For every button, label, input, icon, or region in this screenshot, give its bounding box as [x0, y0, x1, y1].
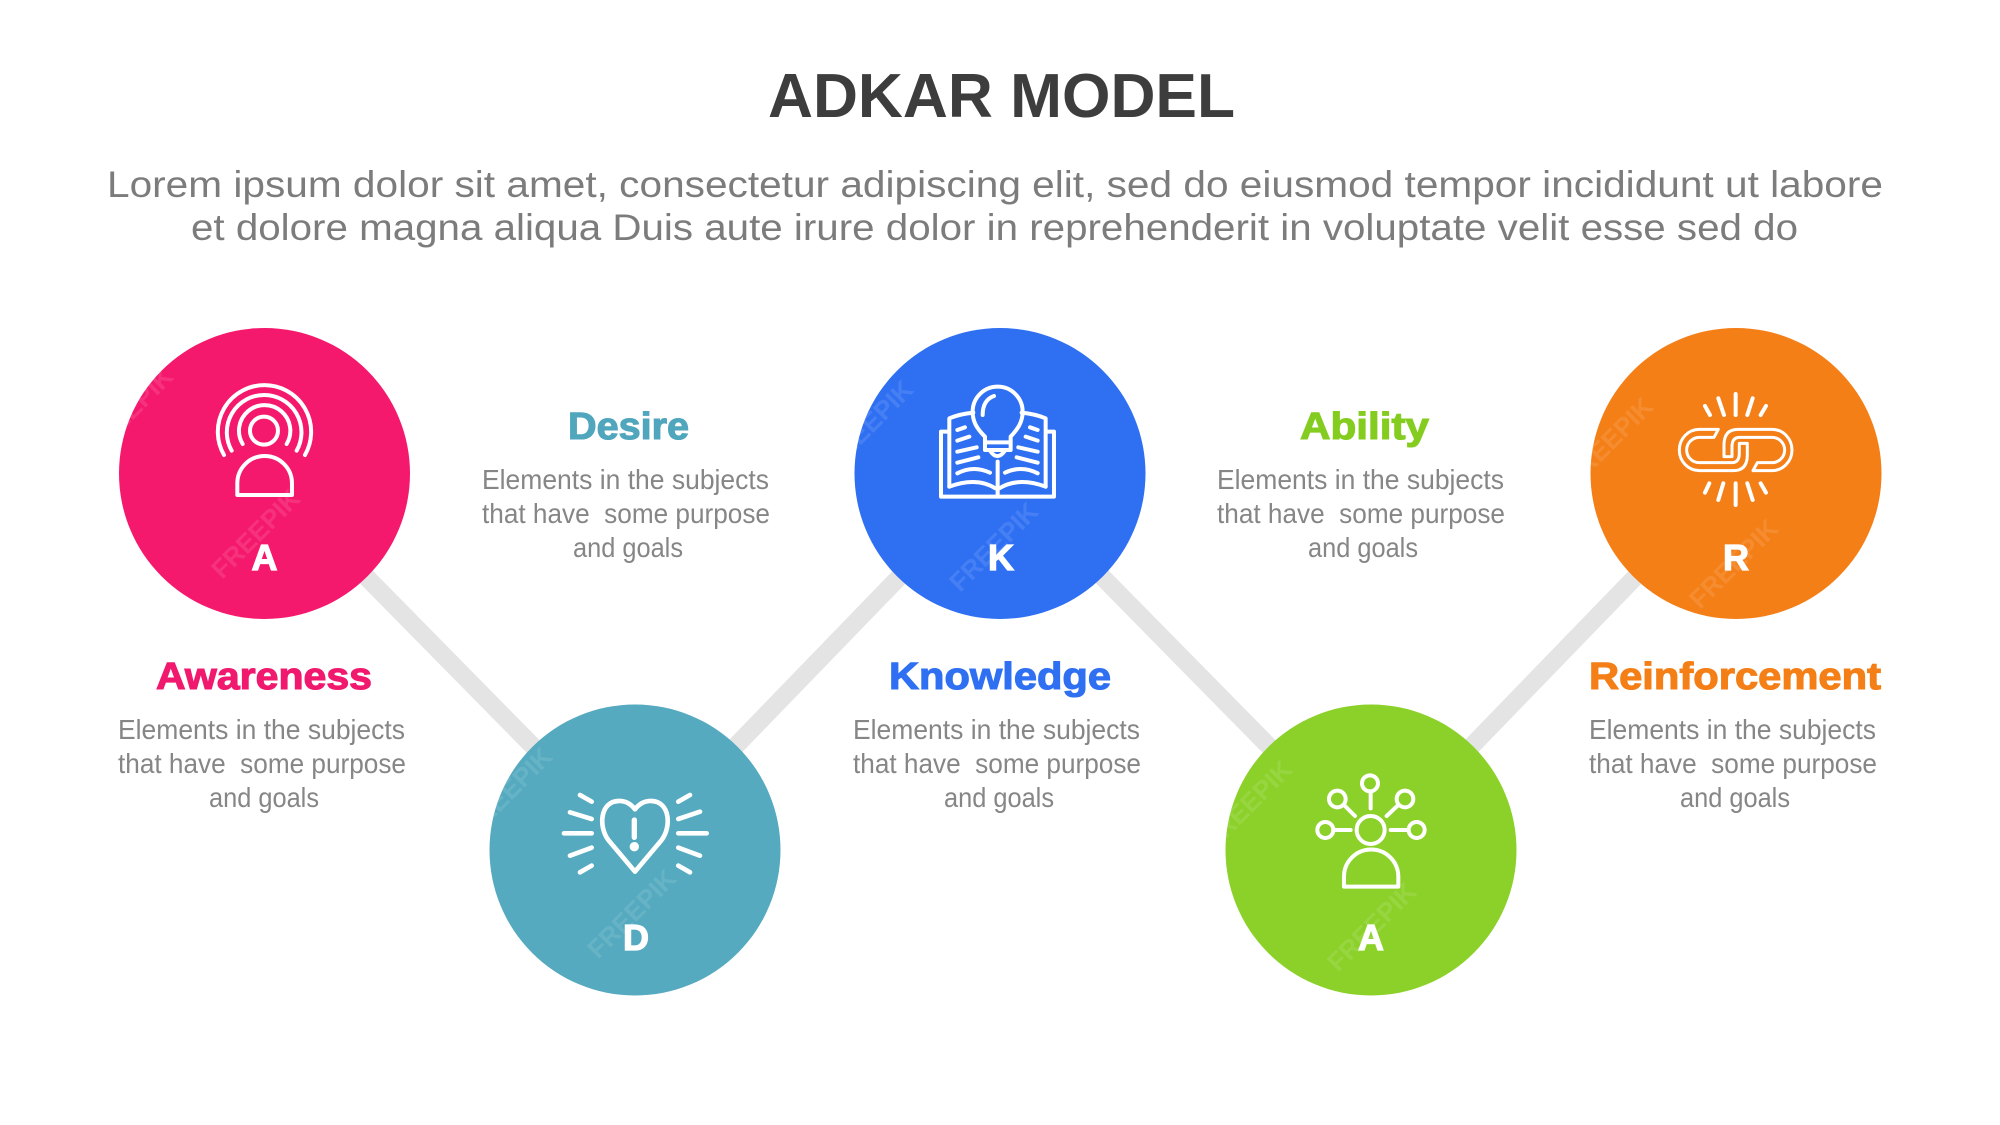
subtitle [107, 164, 1883, 248]
panel: ability circle [1197, 704, 1516, 996]
text block: awareness [118, 656, 406, 813]
letter R: R [1723, 537, 1749, 578]
subtitle: Lorem ipsum dolor sit amet, consectetur adipiscing elit, sed do eiusmod tempor incididunt ut labore [107, 164, 1883, 205]
panel: knowledge circle: FREEPIK [943, 496, 1044, 597]
panel: knowledge circle: FREEPIK [818, 374, 919, 475]
panel: awareness circle: FREEPIK [205, 483, 306, 584]
text block: ability [1217, 406, 1505, 563]
panel: desire circle: FREEPIK [457, 741, 558, 842]
icon: book with light bulb [941, 387, 1054, 497]
icon: person with network nodes [1317, 775, 1425, 887]
text block: awareness: that have some purpose [118, 748, 406, 779]
text block: knowledge: Knowledge [889, 656, 1111, 698]
panel: ability circle: FREEPIK [1321, 876, 1422, 977]
letter A: A [1358, 917, 1384, 958]
text block: desire: Elements in the subjects [482, 464, 769, 495]
text block: reinforcement [1589, 656, 1881, 813]
text block: reinforcement: Elements in the subjects [1589, 714, 1876, 745]
text block: ability: Ability [1300, 406, 1429, 448]
icon: heart with alert [564, 795, 707, 872]
connector lines [264, 473, 1736, 850]
text block: desire: Desire [568, 406, 689, 448]
text block: desire: that have some purpose [482, 498, 770, 529]
subtitle: et dolore magna aliqua Duis aute irure dolor in reprehenderit in voluptate velit esse sed do [191, 207, 1798, 248]
text block: desire [482, 406, 770, 563]
letter D: D [623, 917, 649, 958]
text block: awareness: and goals [209, 782, 319, 813]
text block: ability: Elements in the subjects [1217, 464, 1504, 495]
text block: knowledge: and goals [944, 782, 1054, 813]
icon: chain link with rays [1679, 394, 1792, 505]
panel: desire circle: FREEPIK [581, 863, 682, 964]
letter A: A [252, 537, 278, 578]
text block: reinforcement: and goals [1680, 782, 1790, 813]
panel: reinforcement circle [1558, 328, 1882, 619]
panel: knowledge circle [818, 328, 1146, 619]
text block: awareness: Awareness [156, 656, 372, 698]
text block: reinforcement: that have some purpose [1589, 748, 1877, 779]
panel: reinforcement circle: FREEPIK [1558, 391, 1659, 492]
letter K: K [988, 537, 1014, 578]
panel: desire circle [457, 704, 780, 996]
panel: ability circle: FREEPIK [1197, 754, 1298, 855]
icon: person broadcasting [218, 385, 311, 495]
panel: awareness circle: FREEPIK [78, 361, 179, 462]
text block: reinforcement: Reinforcement [1589, 656, 1881, 698]
text block: knowledge [853, 656, 1141, 813]
panel: reinforcement circle: FREEPIK [1683, 513, 1784, 614]
text block: ability: that have some purpose [1217, 498, 1505, 529]
text block: knowledge: that have some purpose [853, 748, 1141, 779]
text block: desire: and goals [573, 532, 683, 563]
text block: ability: and goals [1308, 532, 1418, 563]
panel: awareness circle [78, 328, 410, 619]
text block: knowledge: Elements in the subjects [853, 714, 1140, 745]
title: ADKAR MODEL [768, 62, 1235, 131]
text block: awareness: Elements in the subjects [118, 714, 405, 745]
